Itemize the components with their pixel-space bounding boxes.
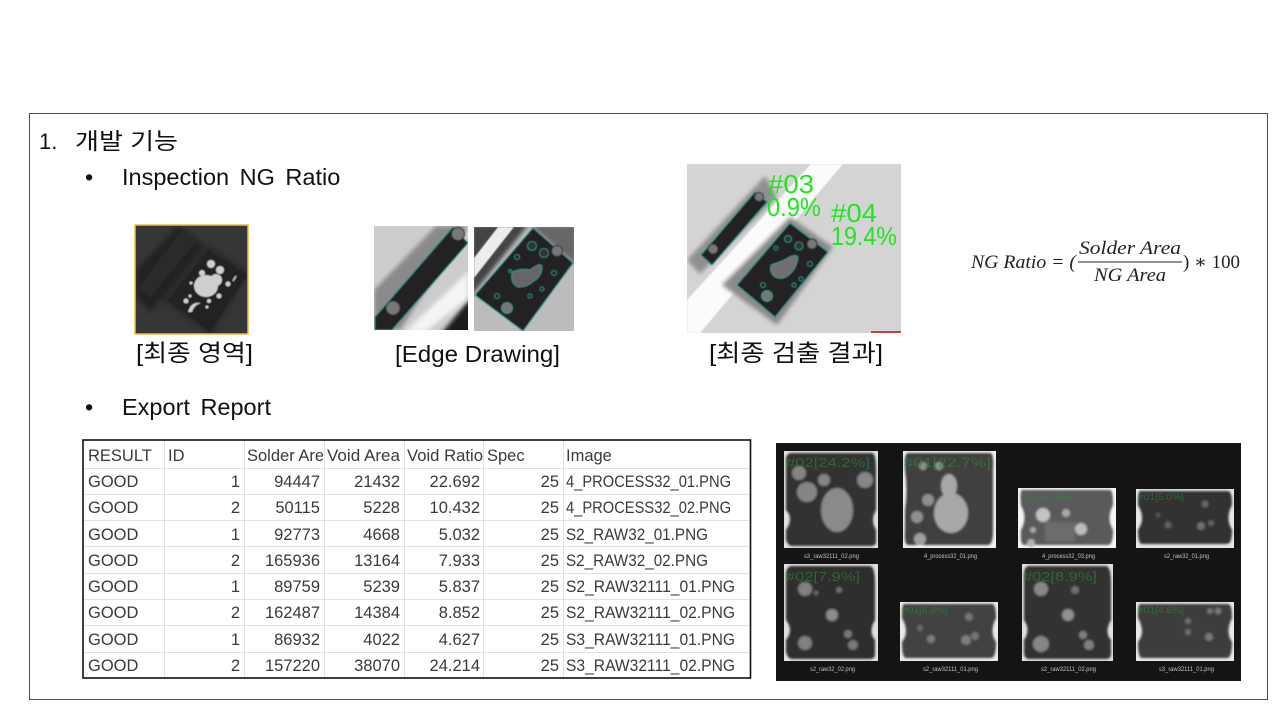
table row 5: 1	[231, 578, 240, 596]
thumbnail: 4_process32_01: 4_process32_01.png	[924, 554, 977, 560]
table row 3: 4668	[363, 526, 400, 544]
table row 4: 165936	[265, 552, 320, 570]
table header row: RESULT	[88, 447, 152, 465]
caption: 최종 검출 결과: [최종 검출 결과]	[709, 340, 883, 366]
table row 7: 4022	[363, 631, 400, 649]
thumbnail: s3_raw32111_01	[1136, 602, 1234, 673]
image: final detection result: 19.4%	[831, 221, 897, 251]
table row 3: 5.032	[439, 526, 480, 544]
table row 8: 38070	[354, 657, 400, 675]
table row 7: 86932	[274, 631, 320, 649]
thumbnail: s2_raw32_02: s2_raw32_02.png	[810, 667, 855, 673]
table row 3	[88, 526, 708, 544]
table header row: Solder Area	[247, 447, 334, 465]
thumbnail: s3_raw32111_01: #01[4.6%]	[1138, 605, 1184, 615]
table row 6: 2	[231, 604, 240, 622]
table row 4: S2_RAW32_02.PNG	[566, 552, 708, 570]
table row 2	[88, 499, 731, 517]
formula: NG Ratio	[970, 238, 1240, 286]
section heading: 1. 개발 기능: 개발 기능	[75, 128, 178, 154]
thumbnail: s2_raw32_02: #02[7.9%]	[786, 569, 860, 584]
image: final detection result: 0.9%	[767, 192, 821, 222]
thumbnail: s3_raw32111_02: #02[24.2%]	[786, 455, 870, 470]
table row 4	[88, 552, 708, 570]
caption: 최종 영역: [최종 영역]	[136, 340, 253, 366]
table row 2: 50115	[275, 499, 320, 517]
sub heading: Export Report: Export Report	[122, 394, 271, 420]
table row 8	[88, 657, 735, 675]
table row 8: 157220	[265, 657, 320, 675]
table row 6: 25	[541, 604, 559, 622]
panel: exported thumbnails	[776, 443, 1241, 681]
thumbnail: 4_process32_01: #01[22.7%]	[904, 455, 991, 470]
table row 3: 25	[541, 526, 559, 544]
image: final detection result: #03	[768, 169, 814, 199]
table row 1: 1	[231, 473, 240, 491]
table row 1: GOOD	[88, 473, 139, 491]
table row 1: 4_PROCESS32_01.PNG	[566, 473, 731, 491]
table header row: Void Ratio	[407, 447, 483, 465]
formula: NG Ratio: NG Ratio = (	[970, 252, 1078, 273]
table header row: Spec	[487, 447, 525, 465]
table row 8: 2	[231, 657, 240, 675]
table row 5: 5239	[363, 578, 400, 596]
thumbnail: 4_process32_01	[903, 451, 996, 560]
table row 2: 25	[541, 499, 559, 517]
table row 3: GOOD	[88, 526, 139, 544]
table header row: Image	[566, 447, 612, 465]
thumbnail: s3_raw32111_02: s3_raw32111_02.png	[804, 554, 859, 560]
table row 2: 10.432	[430, 499, 480, 517]
thumbnail: s2_raw32_01: #01[5.0%]	[1138, 492, 1184, 502]
thumbnail: 4_process32_03	[1018, 488, 1116, 560]
table row 7: 25	[541, 631, 559, 649]
table row 5: 89759	[274, 578, 320, 596]
formula: NG Ratio: Solder Area	[1079, 238, 1181, 259]
image: final detection result	[687, 164, 901, 333]
table row 2: GOOD	[88, 499, 139, 517]
table row 5: GOOD	[88, 578, 139, 596]
table row 8: 24.214	[430, 657, 480, 675]
table row 3: 92773	[274, 526, 320, 544]
image: final detection result: #04	[831, 198, 877, 228]
table row 5: 25	[541, 578, 559, 596]
report table	[83, 440, 750, 678]
table row 6: 14384	[354, 604, 400, 622]
thumbnail: s2_raw32111_02	[1022, 564, 1113, 673]
table row 8: 25	[541, 657, 559, 675]
thumbnail: s2_raw32_02	[784, 564, 878, 673]
section heading: 1. 개발 기능	[39, 128, 178, 154]
section heading: 1. 개발 기능: 1.	[39, 129, 57, 154]
sub heading: Inspection NG Ratio: Inspection NG Ratio	[122, 164, 340, 190]
table row 4: 7.933	[439, 552, 480, 570]
table row 3: S2_RAW32_01.PNG	[566, 526, 708, 544]
image: final region	[135, 225, 250, 336]
table row 8: S3_RAW32111_02.PNG	[566, 657, 735, 675]
thumbnail: s3_raw32111_01: s3_raw32111_01.png	[1159, 667, 1214, 673]
main content frame	[30, 114, 1268, 700]
sub heading: Inspection NG Ratio: •	[85, 164, 93, 190]
table row 1: 94447	[274, 473, 320, 491]
thumbnail: s2_raw32_01	[1136, 489, 1234, 560]
table row 6: 162487	[265, 604, 320, 622]
table row 7: 1	[231, 631, 240, 649]
table row 1	[88, 473, 731, 491]
table header row: Void Area	[327, 447, 401, 465]
table row 6: 8.852	[439, 604, 480, 622]
table header row: ID	[168, 447, 185, 465]
thumbnail: s2_raw32111_02: #02[8.9%]	[1023, 569, 1097, 584]
table row 2: 5228	[363, 499, 400, 517]
thumbnail: s2_raw32_01: s2_raw32_01.png	[1164, 554, 1209, 560]
image: edge drawing strip	[374, 226, 472, 335]
thumbnail: s3_raw32111_02	[784, 451, 878, 560]
table row 2: 4_PROCESS32_02.PNG	[566, 499, 731, 517]
table row 6	[88, 604, 735, 622]
table row 7	[88, 631, 735, 649]
table row 4: 2	[231, 552, 240, 570]
table row 6: S2_RAW32111_02.PNG	[566, 604, 735, 622]
caption: Edge Drawing: [Edge Drawing]	[395, 341, 560, 367]
table row 7: S3_RAW32111_01.PNG	[566, 631, 735, 649]
table row 2: 2	[231, 499, 240, 517]
thumbnail: s2_raw32111_01	[900, 602, 998, 673]
thumbnail: 4_process32_03: #01[6.4%]	[1020, 492, 1075, 502]
table row 4: 25	[541, 552, 559, 570]
table row 4: 13164	[354, 552, 400, 570]
table row 7: GOOD	[88, 631, 139, 649]
table row 5: 5.837	[439, 578, 480, 596]
table row 5: S2_RAW32111_01.PNG	[566, 578, 735, 596]
thumbnail: s2_raw32111_02: s2_raw32111_02.png	[1041, 667, 1096, 673]
table row 3: 1	[231, 526, 240, 544]
image: edge drawing plate	[472, 225, 576, 331]
thumbnail: s2_raw32111_01: #01[6.8%]	[902, 605, 948, 615]
table row 1: 25	[541, 473, 559, 491]
table row 6: GOOD	[88, 604, 139, 622]
formula: NG Ratio: NG Area	[1093, 265, 1166, 286]
table row 1: 21432	[354, 473, 400, 491]
sub heading: Export Report: •	[85, 394, 93, 420]
thumbnail: s2_raw32111_01: s2_raw32111_01.png	[923, 667, 978, 673]
table row 8: GOOD	[88, 657, 139, 675]
table header row	[89, 449, 612, 464]
formula: NG Ratio: ) ∗ 100	[1183, 252, 1240, 273]
table row 7: 4.627	[439, 631, 480, 649]
table row 4: GOOD	[88, 552, 139, 570]
thumbnail: 4_process32_03: 4_process32_03.png	[1042, 554, 1095, 560]
table row 5	[88, 578, 735, 596]
table row 1: 22.692	[430, 473, 480, 491]
